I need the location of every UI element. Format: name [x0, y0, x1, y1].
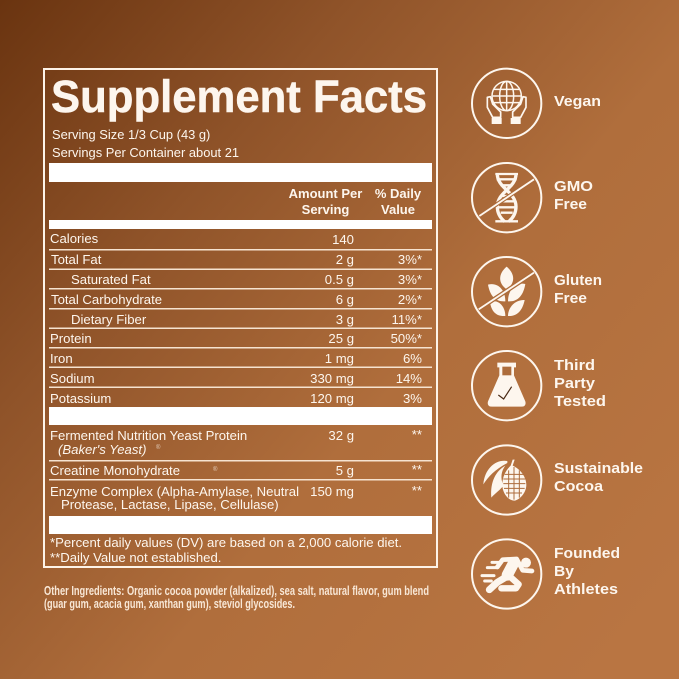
- row: enzyme complex: 150 mg: [310, 484, 354, 499]
- row: calories: 140: [332, 232, 354, 247]
- row: protein: [50, 331, 422, 346]
- row: total carbohydrate: Total Carbohydrate: [51, 292, 162, 307]
- row: enzyme complex: Protease, Lactase, Lipase, Cellulase): [61, 497, 279, 512]
- panel: supplement facts table: [44, 69, 437, 567]
- label: Free: [554, 196, 587, 213]
- footnotes: *Percent daily values (DV) are based on a 2,000 calorie diet.: [50, 535, 402, 550]
- row: sodium: 14%: [396, 371, 422, 386]
- label: Free: [554, 290, 587, 307]
- label: Tested: [554, 393, 606, 410]
- row: creatine monohydrate: [50, 462, 422, 478]
- row: potassium: Potassium: [50, 391, 111, 406]
- row: dietary fiber: Dietary Fiber: [71, 312, 147, 327]
- label: [554, 272, 602, 307]
- row: creatine monohydrate: 5 g: [336, 463, 354, 478]
- icon: globe in hands: [472, 69, 541, 138]
- row: creatine monohydrate: Creatine Monohydrate: [50, 463, 180, 478]
- row: total carbohydrate: [51, 292, 422, 307]
- label: Gluten: [554, 272, 602, 289]
- label: Cocoa: [554, 478, 604, 495]
- column headers: Amount Per: [289, 186, 362, 201]
- label: Third: [554, 357, 595, 374]
- serving information: Serving Size 1/3 Cup (43 g): [52, 127, 210, 142]
- icon: running athlete: [472, 539, 541, 609]
- badge: vegan: [472, 69, 601, 138]
- icon: lab flask with check: [472, 351, 541, 420]
- row: saturated fat: 3%*: [398, 272, 422, 287]
- label: Founded: [554, 545, 620, 562]
- row: dietary fiber: 3 g: [336, 312, 354, 327]
- badge: sustainable cocoa: [472, 445, 643, 515]
- row: protein: 25 g: [328, 331, 354, 346]
- row: fermented nutrition yeast protein: 32 g: [328, 428, 354, 443]
- label: [554, 460, 643, 495]
- label: [554, 545, 620, 598]
- row: sodium: [50, 371, 422, 386]
- badge: gluten free: [472, 257, 602, 326]
- title: Supplement Facts: [51, 71, 427, 122]
- column headers: Serving: [302, 202, 349, 217]
- row: iron: 1 mg: [325, 351, 354, 366]
- row: protein: 50%*: [391, 331, 422, 346]
- icon: crossed DNA helix: [472, 163, 541, 232]
- label: Sustainable: [554, 460, 643, 477]
- row: enzyme complex: Enzyme Complex (Alpha-Amylase, Neutral: [50, 484, 299, 499]
- row: creatine monohydrate: **: [412, 462, 422, 477]
- label: [554, 357, 606, 410]
- row: total carbohydrate: 6 g: [336, 292, 354, 307]
- serving information: [52, 127, 239, 160]
- label: By: [554, 563, 575, 580]
- row: potassium: [50, 391, 422, 406]
- footnotes: [50, 535, 402, 565]
- row: potassium: 3%: [403, 391, 422, 406]
- row dividers: [49, 249, 432, 480]
- other ingredients: [44, 584, 429, 611]
- row: enzyme complex: [50, 483, 422, 512]
- white bar 1: [49, 163, 432, 182]
- label: Party: [554, 375, 596, 392]
- row: iron: Iron: [50, 351, 73, 366]
- serving information: Servings Per Container about 21: [52, 145, 239, 160]
- row: fermented nutrition yeast protein: [50, 427, 422, 457]
- other ingredients: (guar gum, acacia gum, xanthan gum), steviol glycosides.: [44, 597, 295, 611]
- badge: third party tested: [472, 351, 606, 420]
- row: total fat: 3%*: [398, 252, 422, 267]
- row: fermented nutrition yeast protein: Fermented Nutrition Yeast Protein: [50, 428, 247, 443]
- column headers: % Daily: [375, 186, 422, 201]
- row: total fat: [51, 252, 422, 267]
- row: fermented nutrition yeast protein: **: [412, 427, 422, 442]
- row: dietary fiber: 11%*: [392, 312, 422, 327]
- column headers: [289, 186, 422, 217]
- icon: crossed wheat: [472, 257, 541, 326]
- row: saturated fat: Saturated Fat: [71, 272, 151, 287]
- footnotes: **Daily Value not established.: [50, 550, 221, 565]
- row: creatine monohydrate: ®: [213, 466, 218, 473]
- white bar 2: [49, 220, 432, 229]
- row: iron: 6%: [403, 351, 422, 366]
- badge: GMO free: [472, 163, 593, 232]
- row: calories: Calories: [50, 231, 99, 246]
- label: Vegan: [554, 93, 601, 110]
- row: potassium: 120 mg: [310, 391, 354, 406]
- row: saturated fat: 0.5 g: [325, 272, 354, 287]
- row: total fat: Total Fat: [51, 252, 102, 267]
- row: enzyme complex: **: [412, 483, 422, 498]
- label: [554, 178, 593, 213]
- row: fermented nutrition yeast protein: (Baker's Yeast): [58, 442, 146, 457]
- row: calories: [50, 231, 354, 247]
- badge: founded by athletes: [472, 539, 620, 609]
- row: sodium: Sodium: [50, 371, 95, 386]
- other ingredients: Other Ingredients: Organic cocoa powder (alkalized), sea salt, natural flavor, gum blend: [44, 584, 429, 598]
- row: total carbohydrate: 2%*: [398, 292, 422, 307]
- row: sodium: 330 mg: [310, 371, 354, 386]
- row: iron: [50, 351, 422, 366]
- row: fermented nutrition yeast protein: ®: [156, 444, 161, 451]
- row: saturated fat: [71, 272, 422, 287]
- white bar 3: [49, 407, 432, 425]
- row: total fat: 2 g: [336, 252, 354, 267]
- icon: cocoa pod and leaves: [472, 445, 541, 515]
- column headers: Value: [381, 202, 415, 217]
- white bar 4: [49, 516, 432, 534]
- label: GMO: [554, 178, 593, 195]
- row: dietary fiber: [71, 312, 422, 327]
- label: Athletes: [554, 581, 618, 598]
- row: protein: Protein: [50, 331, 92, 346]
